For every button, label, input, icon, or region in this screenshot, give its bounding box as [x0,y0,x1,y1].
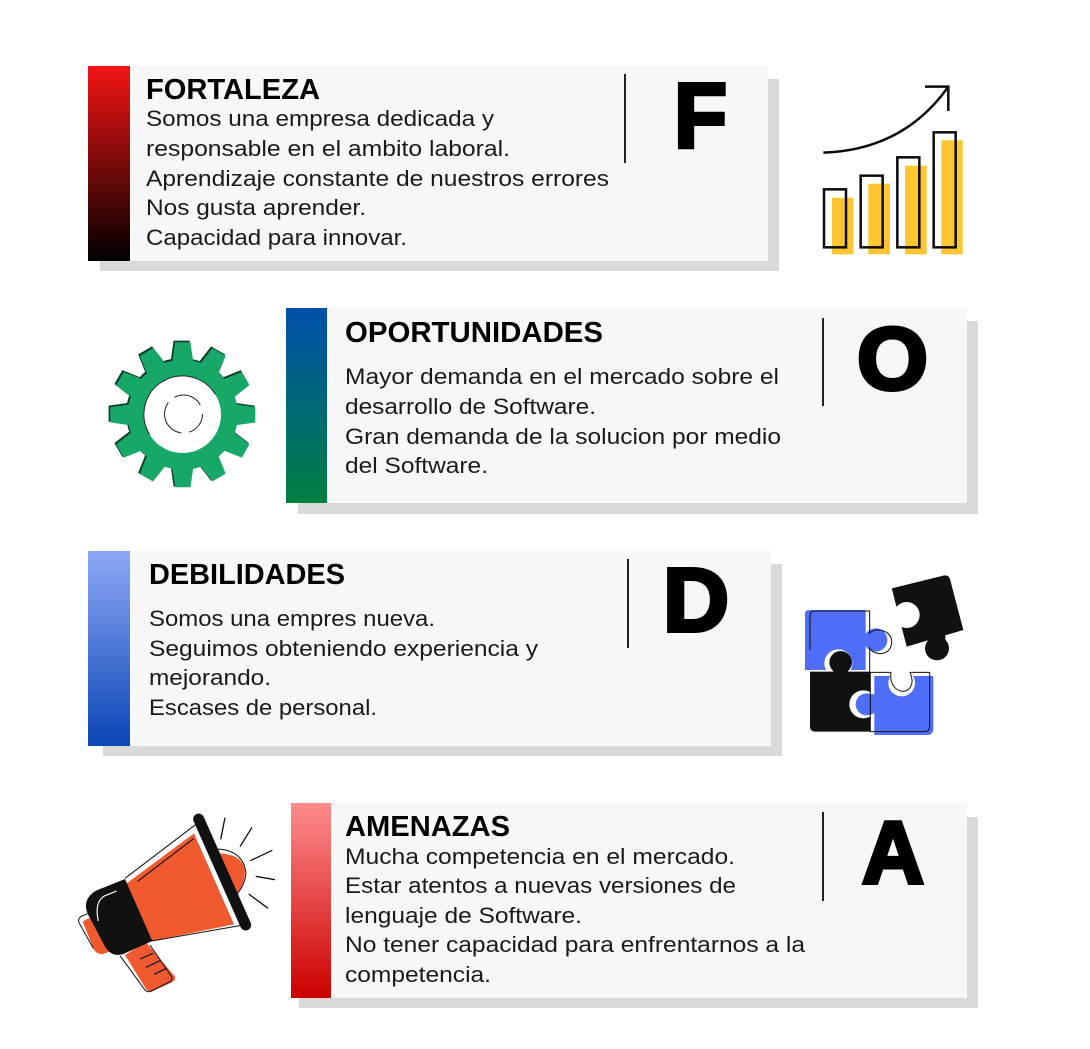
rim [199,819,246,925]
text block: debilidades [149,606,538,720]
letter A: A [862,803,924,902]
text block: fortaleza: responsable en el ambito laboral. [146,136,510,161]
letter D: D [663,551,729,651]
heading: fortaleza: FORTALEZA [146,74,320,106]
heading: amenazas: AMENAZAS [345,811,510,843]
text block: fortaleza: Somos una empresa dedicada y [146,106,494,131]
blue top-left piece [805,610,866,670]
panel: fortaleza [88,65,779,271]
handle [125,942,175,992]
text block: amenazas: competencia. [345,962,491,987]
text block: fortaleza: Capacidad para innovar. [146,225,407,250]
panel: oportunidades [286,308,978,514]
sound rays [221,818,275,908]
text block: amenazas: No tener capacidad para enfrentarnos a la [345,932,806,957]
heading: debilidades: DEBILIDADES [149,559,345,591]
icon: gear [109,341,255,487]
text block: oportunidades: Mayor demanda en el mercado sobre el [345,364,779,389]
heading: oportunidades: OPORTUNIDADES [345,317,603,349]
blue bottom-right piece [874,676,933,735]
icon: puzzle [805,575,963,735]
black bottom-left piece [810,672,870,732]
text block: fortaleza: Aprendizaje constante de nuestros errores [146,166,609,191]
black rotated piece [892,575,963,647]
text block: amenazas [345,844,806,987]
text block: oportunidades: del Software. [345,453,488,478]
panel: amenazas [291,803,978,1008]
cone [127,833,234,941]
letter O: O [857,309,928,408]
gradient bar: oportunidades [286,308,327,503]
back dome [220,853,245,895]
gradient bar: debilidades [88,551,130,746]
rear tab [83,917,113,954]
text block: oportunidades: desarrollo de Software. [345,394,596,419]
gradient bar: amenazas [291,803,331,998]
black body [86,879,152,955]
text block: debilidades: Somos una empres nueva. [149,606,435,631]
icon: megaphone [79,818,275,992]
icon: growth bar chart [823,87,963,254]
text block: fortaleza: Nos gusta aprender. [146,195,366,220]
text block: amenazas: Estar atentos a nuevas versiones de [345,873,736,898]
text block: oportunidades: Gran demanda de la solucion por medio [345,424,781,449]
text block: debilidades: Seguimos obteniendo experiencia y [149,636,538,661]
text block: debilidades: mejorando. [149,665,271,690]
panel: debilidades [88,551,782,756]
text block: oportunidades [345,364,781,478]
letter F: F [674,65,727,167]
text block: debilidades: Escases de personal. [149,695,377,720]
text block: amenazas: Mucha competencia en el mercado. [345,844,735,869]
text block: amenazas: lenguaje de Software. [345,903,582,928]
gradient bar: fortaleza [88,66,130,261]
text block: fortaleza [146,106,609,250]
